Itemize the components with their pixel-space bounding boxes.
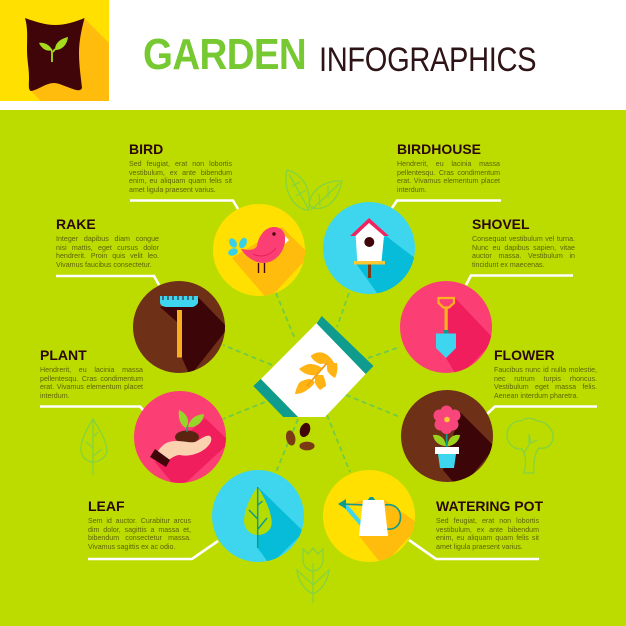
text block: bird [129, 141, 232, 194]
dashed connectors [223, 293, 400, 472]
icon: seeds [285, 421, 315, 450]
text block: leaf [88, 498, 191, 551]
text block: bird: enim, eu aliquam quam felis sit [129, 177, 232, 185]
text block: plant: interdum. [40, 392, 70, 400]
text block: rake [56, 216, 159, 269]
decorative icon: tulip [297, 548, 329, 603]
text block: plant: pellentesqu. Cras condimentum [40, 375, 143, 383]
text block: leaf: Vivamus sagittis ex ac odio. [88, 543, 175, 551]
text block: leaf: Sem id auctor. Curabitur arcus [88, 517, 191, 525]
subtitle: INFOGRAPHICS [319, 41, 536, 79]
text block: watering pot [436, 498, 543, 551]
text block: shovel: auctor massa. Vestibulum in [472, 252, 575, 260]
icon: hand with plant [134, 391, 226, 483]
icon: seed packet [253, 316, 374, 417]
text block: flower: Faucibus nunc id nulla molestie, [494, 366, 597, 374]
text block: watering pot: vestibulum, ex ante bibendum [436, 526, 539, 534]
icon: bird [213, 204, 310, 300]
text block: flower: Vestibulum eget massa felis. [494, 383, 597, 391]
title: GARDEN [143, 31, 306, 79]
icon: watering pot [323, 470, 420, 566]
text block: birdhouse: BIRDHOUSE [397, 141, 481, 157]
text block: birdhouse: Hendrerit, eu lacinia massa [397, 160, 500, 168]
text block: birdhouse [397, 141, 500, 194]
text block: watering pot: enim, eu aliquam quam felis sit [436, 534, 539, 542]
text block: plant: PLANT [40, 347, 87, 363]
text block: flower: FLOWER [494, 347, 555, 363]
text block: shovel [472, 216, 575, 269]
text block: bird: Sed feugiat, erat non lobortis [129, 160, 232, 168]
text block: flower [494, 347, 597, 400]
text block: shovel: Consequat vestibulum vel turna. [472, 235, 575, 243]
text block: rake: nisi mattis, eget cursus dolor [56, 244, 159, 252]
text block: leaf: dim dolor, sagittis a massa et, [88, 526, 191, 534]
text block: plant: Hendrerit, eu lacinia massa [40, 366, 143, 374]
text block: watering pot: Sed feugiat, erat non lobortis [436, 517, 539, 525]
decorative icon: leaves [286, 170, 342, 210]
text block: rake: RAKE [56, 216, 96, 232]
text block: rake: Integer dapibus diam congue [56, 235, 159, 243]
text block: bird: BIRD [129, 141, 163, 157]
white leader lines [40, 200, 597, 559]
icon: shovel [400, 281, 495, 378]
text block: bird: vestibulum, ex ante bibendum [129, 169, 232, 177]
text block: plant: erat. Vivamus elementum placet [40, 383, 143, 391]
text block: rake: Vivamus faucibus consectetur. [56, 261, 152, 269]
icon: rake [133, 281, 228, 376]
text block: birdhouse: pellentesqu. Cras condimentum [397, 169, 500, 177]
text block: flower: nec rutrum turpis rhoncus. [494, 375, 597, 383]
icon: leaf [212, 470, 304, 565]
text block: flower: Aenean interdum pharetra. [494, 392, 578, 400]
text block: plant [40, 347, 143, 400]
text block: birdhouse: erat. Vivamus elementum placet [397, 177, 500, 185]
decorative icon: leaf [81, 419, 107, 475]
icon: flower pot [401, 390, 495, 490]
decorative icon: tree [507, 418, 553, 473]
text block: watering pot: amet ligula praesent varius. [436, 543, 523, 551]
text block: birdhouse: interdum. [397, 186, 427, 194]
text block: watering pot: WATERING POT [436, 498, 543, 514]
text block: leaf: LEAF [88, 498, 125, 514]
icon: seed bag badge [0, 0, 109, 101]
text block: leaf: bibendum consectetur massa. [88, 534, 191, 542]
text block: bird: amet ligula praesent varius. [129, 186, 216, 194]
text block: shovel: Nunc eu dapibus sapien, vitae [472, 244, 575, 252]
text block: shovel: SHOVEL [472, 216, 530, 232]
icon: birdhouse [323, 202, 415, 294]
text block: shovel: tincidunt ex maecenas. [472, 261, 545, 269]
text block: rake: hendrerit. Proin quis velit leo. [56, 252, 159, 260]
